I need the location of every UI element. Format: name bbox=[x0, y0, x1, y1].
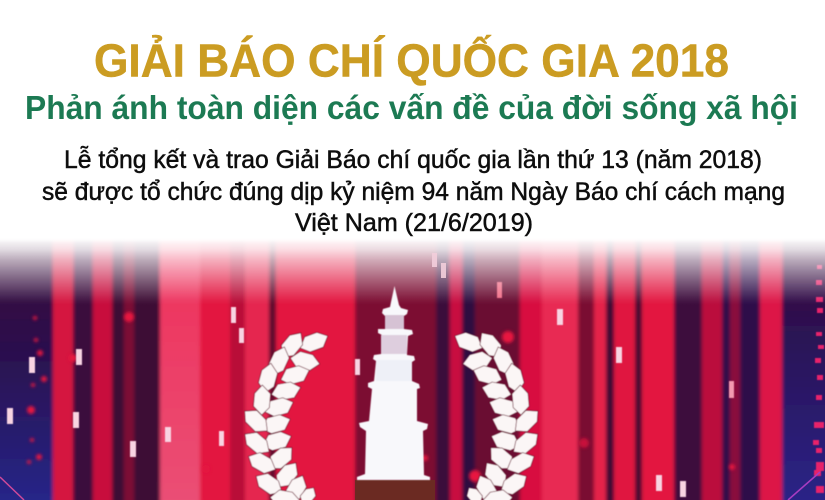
award: pagoda trophy bbox=[355, 286, 435, 500]
intro text: Lễ tổng kết và trao Giải Báo chí quốc gia lần thứ 13 (năm 2018) bbox=[64, 145, 762, 174]
faded sparkles in fade bbox=[432, 253, 446, 278]
pink particle column right bbox=[813, 265, 824, 493]
stage background with vertical light stripes bbox=[0, 235, 825, 500]
trophy wooden base bbox=[355, 480, 435, 500]
white top fade bbox=[0, 235, 825, 305]
intro text bbox=[42, 145, 785, 237]
pagoda tower bbox=[357, 286, 430, 480]
wreath: right wheat branch bbox=[452, 328, 543, 500]
title: GIẢI BÁO CHÍ QUỐC GIA 2018 bbox=[94, 34, 729, 86]
subtitle: Phản ánh toàn diện các vấn đề của đời sống xã hội bbox=[25, 89, 798, 126]
diagonal light streaks bbox=[0, 472, 820, 500]
glowing red dots bbox=[27, 312, 735, 482]
white sparkle rectangles bbox=[7, 282, 734, 497]
intro text: Việt Nam (21/6/2019) bbox=[295, 209, 533, 237]
intro text: sẽ được tổ chức đúng dịp kỷ niệm 94 năm Ngày Báo chí cách mạng bbox=[42, 178, 785, 206]
wreath: left wheat branch bbox=[240, 328, 331, 500]
